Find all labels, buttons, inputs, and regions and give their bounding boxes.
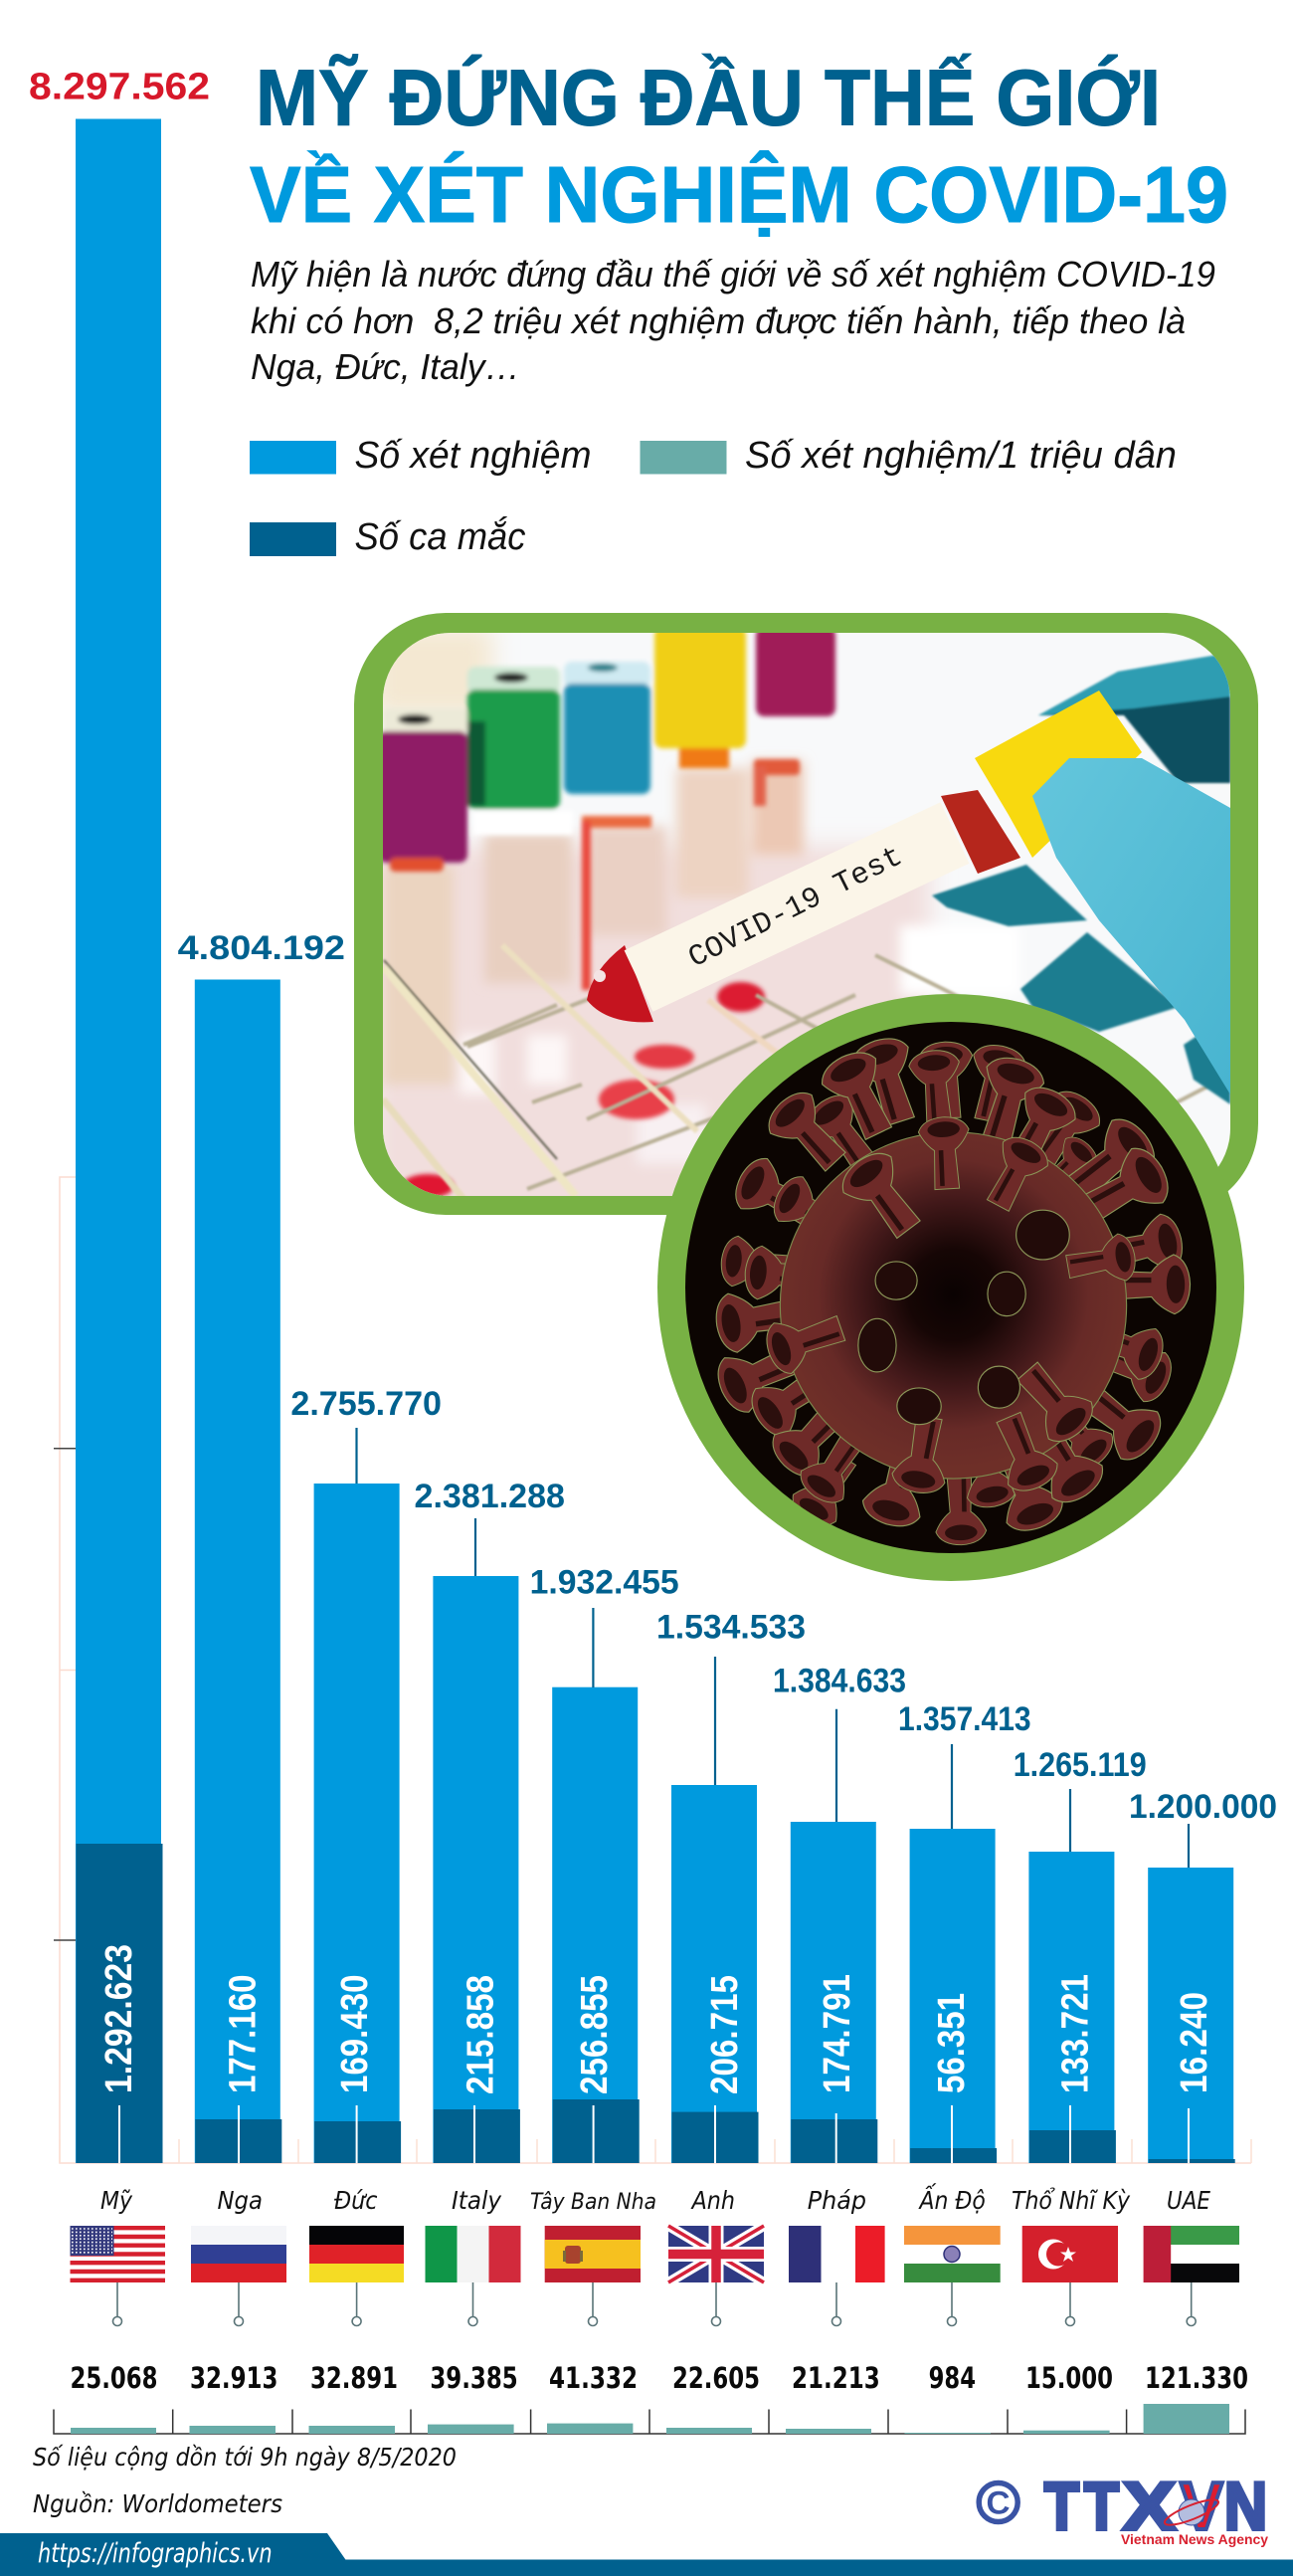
flag pins — [113, 2282, 1196, 2326]
bar: Pháp — [791, 1822, 877, 2163]
tests per million values: 32.913 — [190, 2361, 277, 2395]
case numbers (vertical) — [98, 1944, 1215, 2094]
chart gridlines — [54, 1177, 1251, 2163]
tests per million values: 21.213 — [792, 2361, 880, 2395]
case numbers (vertical): 206.715 — [704, 1975, 746, 2094]
front tube with cap — [587, 691, 1230, 1094]
legend: tests — [250, 435, 591, 477]
TTXVN logo: T — [1044, 2469, 1079, 2544]
bar: Ấn Độ — [910, 1829, 997, 2163]
TTXVN logo: T — [1084, 2469, 1119, 2544]
tests per million values: 25.068 — [70, 2361, 157, 2395]
tests per million values — [70, 2361, 1248, 2395]
total test values with leader lines — [178, 929, 1277, 1868]
total test values with leader lines: 1.265.119 — [1014, 1746, 1147, 1784]
footer bar — [0, 2533, 1293, 2576]
data note: Số liệu cộng dồn tới 9h ngày 8/5/2020 — [33, 2443, 457, 2472]
front spikes — [760, 1115, 1139, 1497]
flag: UK — [668, 2226, 764, 2282]
country names: Pháp — [808, 2186, 866, 2215]
intro text: Nga, Đức, Italy… — [251, 346, 520, 387]
bar: Thổ Nhĩ Kỳ — [1028, 1852, 1116, 2163]
source: Nguồn: Worldometers — [33, 2489, 282, 2518]
country names: Italy — [452, 2186, 502, 2215]
legend — [250, 435, 1177, 558]
bar: Anh — [671, 1785, 758, 2163]
flag: Spain — [545, 2226, 641, 2282]
blurred tube caps — [378, 627, 835, 1198]
tube label: COVID-19 Test — [683, 841, 908, 976]
country names: UAE — [1167, 2186, 1210, 2215]
title — [250, 54, 1228, 239]
legend: tests: Số xét nghiệm — [354, 435, 591, 477]
tests per million values: 22.605 — [672, 2361, 760, 2395]
total test values with leader lines: 4.804.192 — [178, 929, 345, 967]
rear spikes — [710, 1032, 1191, 1546]
total value: United States: 8.297.562 — [29, 66, 210, 107]
case numbers (vertical): 16.240 — [1174, 1992, 1215, 2093]
flags — [70, 2226, 1239, 2282]
total test values with leader lines: 1.534.533 — [656, 1609, 806, 1647]
country names: Nga — [217, 2186, 263, 2215]
total test values with leader lines: 1.932.455 — [530, 1564, 679, 1602]
flag: France — [789, 2226, 885, 2282]
white leader lines in bars — [119, 2105, 1189, 2163]
TTXVN logo: N — [1224, 2469, 1267, 2544]
country names — [100, 2183, 1210, 2215]
case numbers (vertical): 169.430 — [334, 1974, 376, 2093]
bar: Đức — [314, 1484, 401, 2163]
total test values with leader lines: 1.200.000 — [1129, 1788, 1277, 1826]
legend: cases: Số ca mắc — [354, 515, 525, 558]
country names: Ấn Độ — [918, 2183, 986, 2215]
end-on spikes — [858, 1210, 1069, 1425]
country names: Anh — [690, 2186, 735, 2215]
country names: Mỹ — [100, 2186, 133, 2215]
country names: Thổ Nhĩ Kỳ — [1012, 2186, 1131, 2215]
tests per million values: 39.385 — [430, 2361, 518, 2395]
TTXVN logo — [979, 2469, 1268, 2547]
glove — [932, 653, 1230, 1104]
tests per million values: 15.000 — [1025, 2361, 1113, 2395]
flag: Turkey — [1022, 2226, 1118, 2282]
photo frame: COVID-19 test tubes — [354, 613, 1258, 1224]
case numbers (vertical): 215.858 — [460, 1975, 501, 2094]
wire rack — [383, 945, 1230, 1204]
bar: Nga — [195, 979, 281, 2163]
virus body — [780, 1132, 1127, 1479]
flag: Russia — [191, 2226, 286, 2282]
tests per million values: 41.332 — [549, 2361, 638, 2395]
TTXVN logo: X — [1123, 2469, 1176, 2544]
country names: Tây Ban Nha — [530, 2190, 656, 2215]
blurred tube bodies — [384, 761, 1019, 1164]
total test values with leader lines: 2.755.770 — [290, 1385, 442, 1423]
intro text: Mỹ hiện là nước đứng đầu thế giới về số xét nghiệm COVID-19 — [251, 254, 1215, 295]
flag: UAE — [1144, 2226, 1239, 2282]
tests per million values: 984 — [929, 2361, 976, 2395]
case numbers (vertical): 133.721 — [1055, 1974, 1097, 2093]
title: MỸ ĐỨNG ĐẦU THẾ GIỚI — [256, 54, 1161, 141]
case numbers (vertical): 256.855 — [574, 1975, 616, 2094]
country names: Đức — [334, 2186, 378, 2215]
TTXVN logo: V — [1180, 2469, 1223, 2544]
virus illustration — [657, 994, 1244, 1581]
TTXVN logo: Vietnam News Agency — [1121, 2531, 1268, 2547]
tests per million values: 32.891 — [310, 2361, 398, 2395]
tests per million bar chart — [54, 2404, 1245, 2434]
case numbers (vertical): 174.791 — [817, 1974, 858, 2093]
legend: cases — [250, 515, 525, 558]
flag: India — [904, 2226, 1001, 2282]
total test values with leader lines: 2.381.288 — [414, 1478, 565, 1515]
case numbers (vertical): 177.160 — [223, 1974, 265, 2093]
total test values with leader lines: 1.384.633 — [773, 1663, 906, 1700]
bar: Italy — [433, 1576, 520, 2163]
website url: https://infographics.vn — [38, 2538, 273, 2569]
intro text: khi có hơn 8,2 triệu xét nghiệm được tiến hành, tiếp theo là — [251, 300, 1186, 341]
title: VỀ XÉT NGHIỆM COVID-19 — [250, 150, 1228, 239]
soft pink background — [373, 627, 930, 1224]
TTXVN logo: C — [987, 2485, 1011, 2521]
bar: Tây Ban Nha — [552, 1687, 640, 2163]
legend: tests per million: Số xét nghiệm/1 triệu dân — [745, 435, 1177, 477]
flag: USA — [70, 2226, 165, 2282]
bar: UAE — [1148, 1868, 1235, 2163]
total test values with leader lines: 1.357.413 — [898, 1700, 1031, 1738]
bar: Mỹ — [76, 119, 163, 2163]
intro text — [251, 254, 1215, 387]
case numbers (vertical): 1.292.623 — [98, 1944, 140, 2093]
tests per million values: 121.330 — [1145, 2361, 1248, 2395]
bar chart — [76, 119, 1235, 2163]
case numbers (vertical): 56.351 — [931, 1993, 973, 2093]
flag: Germany — [309, 2226, 404, 2282]
flag: Italy — [426, 2226, 521, 2282]
